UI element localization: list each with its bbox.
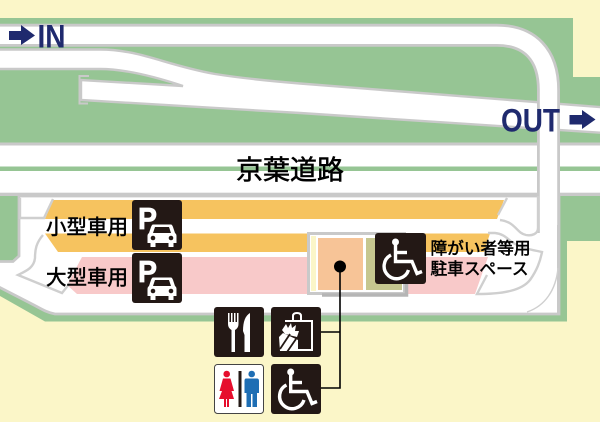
label: accessible parking: 障がい者等用 <box>430 239 531 258</box>
icon: restaurant <box>214 307 264 357</box>
access road <box>0 35 560 315</box>
IN label with arrow: IN <box>38 18 66 54</box>
icon: car parking <box>132 200 182 250</box>
entrance ramp <box>0 50 600 133</box>
green area <box>0 18 600 322</box>
building marker dot <box>334 260 346 272</box>
OUT label with arrow: OUT <box>501 102 560 138</box>
icon: restrooms <box>214 364 264 414</box>
IN label with arrow <box>9 18 66 54</box>
label: accessible parking <box>430 239 531 278</box>
road name: 京葉道路 <box>236 156 344 186</box>
icon: large vehicle parking <box>132 253 182 303</box>
icon: car parking: P <box>138 201 157 236</box>
parking rows: standard cars <box>45 200 504 252</box>
expressway <box>0 142 600 196</box>
icon: accessible parking <box>375 233 426 284</box>
service building <box>308 234 406 295</box>
icon: accessible restroom <box>271 364 321 414</box>
label: standard car parking: 小型車用 <box>46 216 128 239</box>
label: large vehicle parking: 大型車用 <box>46 266 128 290</box>
island outlines <box>18 196 558 312</box>
icon: large vehicle parking: P <box>138 254 157 289</box>
label: accessible parking: 駐車スペース <box>430 260 529 278</box>
parking rows: large vehicles <box>67 257 488 294</box>
parking area ground <box>0 196 559 314</box>
leader lines to facility icons <box>320 267 340 388</box>
icon: shop <box>271 307 321 357</box>
